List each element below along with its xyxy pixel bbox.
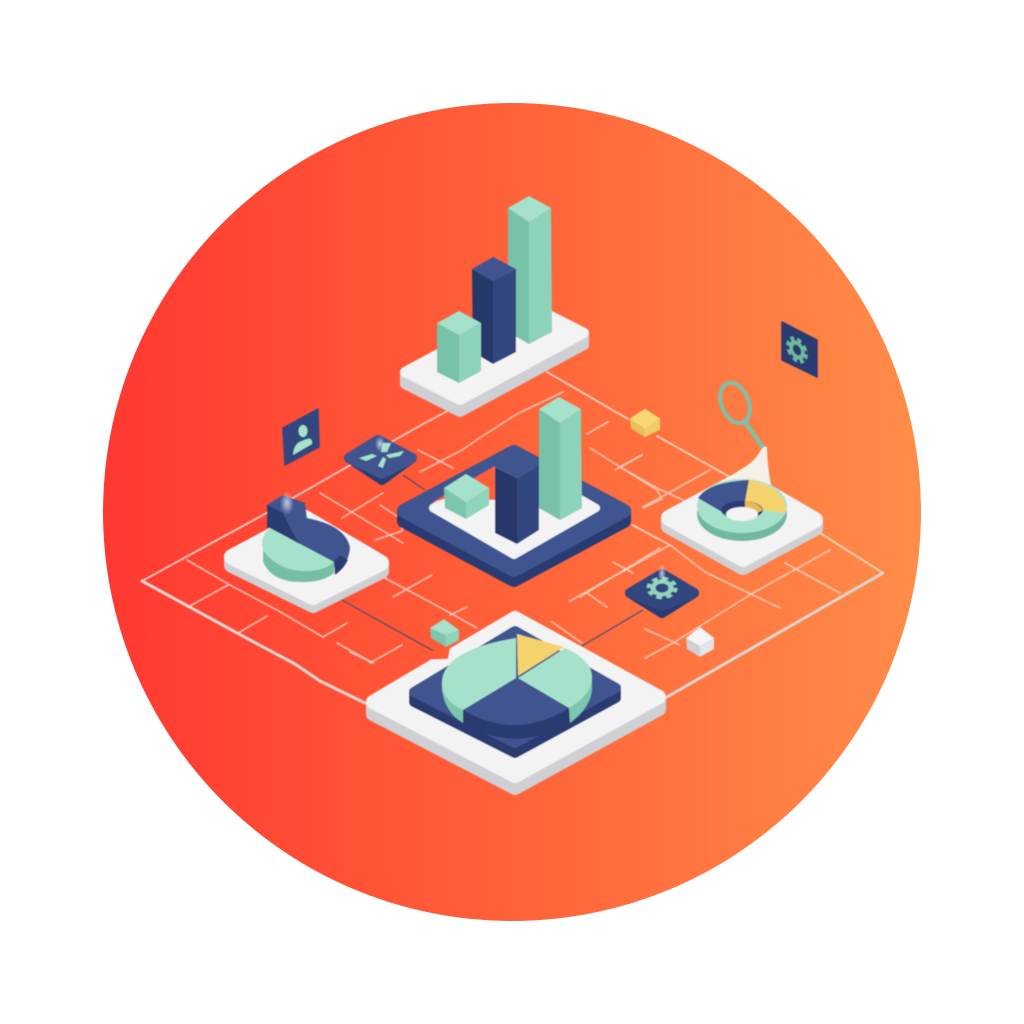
bar: short green — [437, 311, 481, 383]
bar: navy — [495, 453, 539, 544]
artwork — [142, 196, 883, 788]
bar: tall green — [539, 397, 582, 520]
donut chart — [697, 479, 787, 541]
platform: white base — [373, 618, 659, 788]
platform: top white — [405, 305, 584, 412]
icon: upper gear tile — [782, 322, 817, 377]
platform: white — [669, 478, 815, 567]
platform: navy inset — [414, 631, 616, 753]
pie: navy wedge — [463, 678, 570, 739]
centre navy platform with bar chart — [404, 397, 624, 580]
gear — [649, 579, 675, 597]
pie: yellow wedge — [517, 634, 564, 676]
gear — [788, 335, 806, 365]
pie: green half — [262, 528, 334, 582]
bar: tall green — [508, 196, 552, 344]
platform: white inset — [433, 461, 596, 555]
grid: outer edges — [142, 372, 883, 581]
cube: white — [686, 627, 714, 657]
bar: navy — [472, 257, 516, 364]
background circle — [103, 103, 921, 921]
platform notch — [417, 648, 450, 660]
magnifier beam — [728, 446, 772, 490]
grid: front edges — [142, 573, 883, 703]
magnifier — [715, 378, 762, 446]
cube: small green — [430, 619, 459, 647]
bottom large platform with pie — [373, 618, 659, 788]
platform: navy base — [404, 452, 624, 580]
platform: white — [232, 518, 381, 605]
right platform with donut — [669, 378, 815, 567]
isometric grid floor — [142, 372, 883, 703]
icon: person tile — [283, 409, 319, 465]
cube: yellow — [631, 410, 659, 436]
pie: navy tower — [267, 491, 350, 575]
platform: cut-out window — [431, 466, 495, 503]
top bar chart on floating platform — [405, 196, 584, 412]
pie: left green wedge — [442, 638, 516, 723]
grid: inner lines — [187, 392, 840, 663]
connector lines — [340, 475, 643, 659]
left platform with pie — [232, 491, 381, 605]
icon: lower gear tile — [630, 563, 694, 613]
icon: star tile — [349, 436, 412, 480]
star petals — [359, 443, 404, 468]
pie: right green wedge — [518, 648, 592, 723]
cube: green — [444, 474, 489, 519]
